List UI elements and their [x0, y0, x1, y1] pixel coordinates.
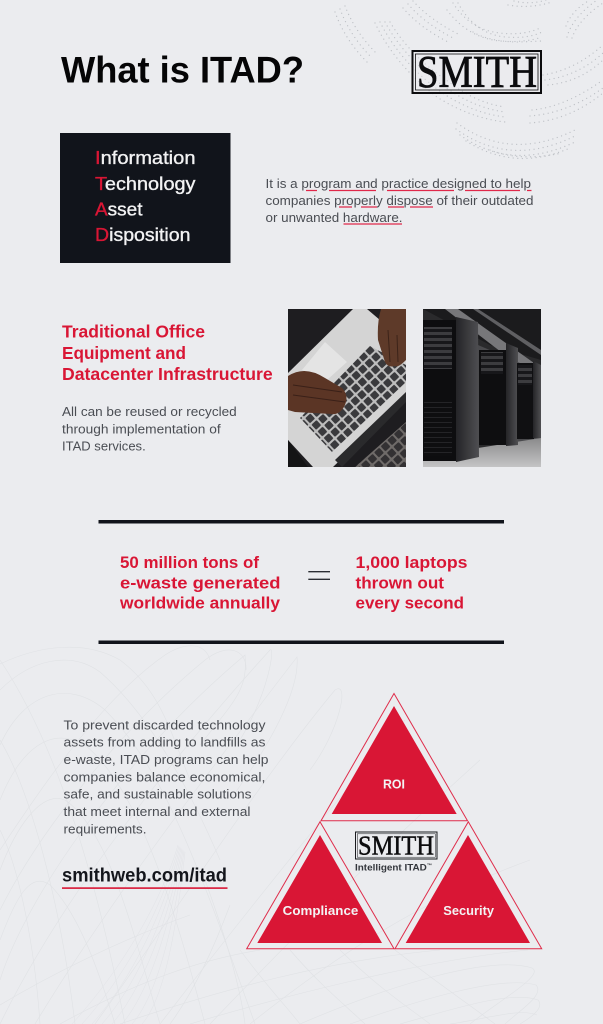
body text: prevent discarded technology: To prevent discarded technology: [64, 717, 266, 732]
panel: ITAD acronym: [60, 133, 230, 263]
stat: e-waste generated: e-waste generated: [120, 574, 280, 592]
triangle: Security: [395, 822, 542, 949]
center SMITH Intelligent ITAD logo: Intelligent ITAD: [355, 863, 424, 874]
triangle: ROI: [321, 694, 468, 821]
triangle: Security: Security: [443, 903, 495, 918]
stat: laptops thrown out: every second: [356, 594, 464, 613]
SMITH logo: SMITH: [417, 47, 537, 97]
acronym line: Asset: Asset: [95, 198, 142, 220]
heading: traditional office equipment: Datacenter Infrastructure: [62, 364, 273, 384]
body text: prevent discarded technology: [64, 717, 268, 836]
heading: traditional office equipment: Equipment and: [62, 343, 186, 363]
divider: top rule: [98, 520, 504, 524]
definition text: companies properly dispose of their outdated: [266, 193, 534, 208]
body text: reuse or recycle: [62, 404, 237, 454]
triangle: ROI: ROI: [383, 777, 405, 792]
title: What is ITAD?: [61, 50, 304, 90]
stat: e-waste generated: 50 million tons of: [120, 553, 259, 572]
acronym line: Information: Information: [95, 147, 196, 168]
triangle: Compliance: Compliance: [283, 903, 358, 918]
body text: reuse or recycle: ITAD services.: [62, 439, 146, 454]
body text: prevent discarded technology: e-waste, ITAD programs can help: [64, 752, 268, 767]
background wire fan: [72, 845, 185, 1024]
photo: hands on laptop keyboard: [288, 309, 406, 467]
definition text: [266, 176, 534, 225]
stat: laptops thrown out: 1,000 laptops: [356, 553, 468, 572]
acronym line: Disposition: Disposition: [95, 224, 190, 245]
heading: traditional office equipment: Traditional Office: [62, 322, 205, 342]
photo: datacenter server racks: [423, 309, 541, 467]
body text: reuse or recycle: through implementation of: [62, 421, 221, 436]
body text: prevent discarded technology: that meet internal and external: [64, 804, 251, 819]
definition text: It is a program and practice designed to help: [266, 176, 531, 191]
divider: bottom rule: [98, 640, 504, 644]
stat: e-waste generated: worldwide annually: [119, 594, 281, 613]
acronym line: Technology: Technology: [95, 173, 196, 194]
body text: prevent discarded technology: companies balance economical,: [64, 769, 266, 784]
background wire mesh: [0, 646, 540, 1024]
body text: prevent discarded technology: requirements.: [64, 821, 146, 836]
stat: laptops thrown out: [356, 553, 468, 613]
body text: reuse or recycle: All can be reused or recycled: [62, 404, 237, 419]
background dot arcs: [335, 0, 603, 158]
stat: laptops thrown out: thrown out: [356, 574, 444, 592]
center SMITH Intelligent ITAD logo: SMITH: [358, 830, 434, 860]
triangle: Compliance: [247, 822, 394, 949]
body text: prevent discarded technology: safe, and sustainable solutions: [64, 787, 252, 802]
center SMITH Intelligent ITAD logo: ™: [427, 863, 432, 869]
heading: traditional office equipment: [62, 322, 273, 384]
stat: e-waste generated: [119, 553, 281, 613]
body text: prevent discarded technology: assets from adding to landfills as: [64, 735, 266, 750]
link: smithweb.com/itad: smithweb.com/itad: [62, 865, 227, 886]
equals sign: [308, 572, 330, 579]
definition text: or unwanted hardware.: [266, 210, 402, 225]
center SMITH Intelligent ITAD logo: [355, 830, 437, 874]
